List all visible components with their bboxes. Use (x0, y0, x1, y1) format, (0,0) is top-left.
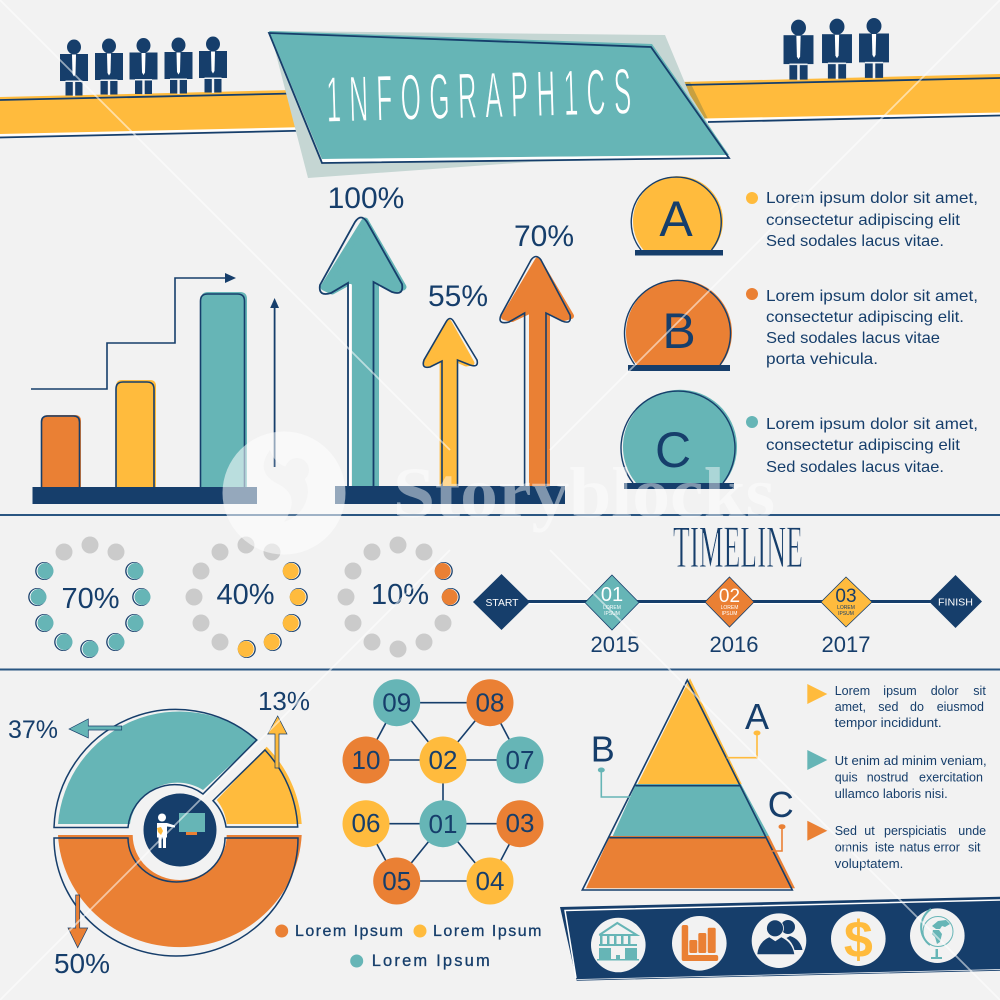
node 10 (342, 736, 390, 784)
node 07 (496, 736, 544, 784)
node 05 (373, 858, 420, 904)
year 2017: 2017 (822, 632, 870, 657)
yellow bar (116, 380, 156, 487)
milestone 01: IPSUM (604, 611, 620, 617)
item 1: Lorem (835, 684, 870, 698)
milestone 03: IPSUM (838, 611, 854, 617)
label B: B (591, 729, 615, 770)
item 2 (807, 750, 987, 801)
title plate shadow (270, 31, 729, 178)
timeline line (526, 602, 931, 604)
panel: icon ribbon (560, 897, 1000, 981)
text block B (746, 288, 978, 368)
item 3: Sed (835, 824, 857, 838)
radial progress 70% (28, 536, 151, 658)
pyramid outline (582, 680, 792, 890)
item 3: natus (900, 841, 930, 855)
item 2: ullamco laboris nisi. (835, 787, 948, 801)
text block C (746, 416, 978, 476)
right group of people icons (784, 18, 889, 80)
pyramid yellow tier (638, 678, 742, 784)
teal bar (201, 292, 247, 487)
node 03 (496, 800, 544, 847)
start marker (473, 574, 530, 630)
text block C: Lorem ipsum dolor sit amet, (766, 416, 978, 433)
vertical arrow (270, 298, 279, 467)
text block C: consectetur adipiscing elit (766, 437, 961, 454)
node 08: 08 (476, 688, 504, 718)
radial progress 10%: 10% (371, 579, 429, 611)
icon: bar chart (672, 916, 727, 971)
icon: dollar (831, 911, 886, 969)
item 3 (807, 821, 986, 871)
milestone 03: 03 (835, 586, 857, 607)
title plate (269, 31, 729, 163)
node 07: 07 (506, 745, 534, 775)
stepped arrow (31, 273, 236, 389)
item 1 (807, 684, 986, 730)
base bar (32, 487, 257, 504)
item 3: perspiciatis (884, 824, 947, 838)
watermark: Storyblocks (393, 453, 775, 533)
arrow to 13% (268, 716, 287, 768)
panel: numbered network (342, 679, 544, 904)
orange segment 50% (54, 835, 302, 956)
arrow base bar (335, 486, 565, 504)
item 3: ut (864, 824, 875, 838)
left ribbon band (0, 90, 310, 138)
left group of people icons (60, 36, 227, 96)
milestone 01: 01 (601, 584, 623, 606)
node 05: 05 (382, 866, 411, 896)
node 10: 10 (352, 745, 380, 775)
year 2015: 2015 (591, 632, 639, 657)
node 04 (466, 858, 514, 904)
item 3: sit (968, 841, 981, 855)
item 3: voluptatem. (835, 857, 903, 871)
label 13%: 13% (258, 686, 310, 716)
item 2: Ut enim ad minim veniam, (835, 754, 987, 768)
text block C: Sed sodales lacus vitae. (766, 459, 944, 476)
milestone 02 (705, 577, 754, 627)
badge C: C (655, 422, 691, 478)
item 3: omnis (835, 841, 868, 855)
label 70%: 70% (514, 220, 574, 253)
node 04: 04 (476, 866, 504, 896)
radial progress 70%: 70% (61, 583, 120, 615)
text block B: porta vehicula. (766, 351, 878, 368)
item 1: dolor (931, 684, 958, 698)
panel: timeline (473, 514, 982, 657)
item 3: unde (958, 824, 986, 838)
node 08 (466, 679, 514, 726)
arrow to 50% (68, 895, 88, 948)
node 09: 09 (382, 688, 411, 718)
node 02: 02 (429, 745, 457, 775)
badge A: A (659, 191, 693, 247)
header banner (0, 18, 1000, 178)
label 50%: 50% (54, 948, 110, 979)
yellow arrow 55% (423, 318, 477, 487)
node 03: 03 (506, 808, 534, 838)
node 02 (420, 736, 466, 784)
item 3: error (934, 841, 960, 855)
item 2: exercitation (919, 771, 983, 785)
pyramid orange tier (586, 836, 795, 888)
milestone 01 (585, 575, 639, 630)
label A: A (745, 696, 769, 737)
item 2: quis (835, 771, 858, 785)
label C: C (768, 784, 794, 825)
milestone 03 (821, 577, 872, 627)
finish marker: FINISH (938, 598, 973, 608)
panel: pyramid chart (582, 678, 795, 890)
milestone 01: LOREM (603, 605, 621, 611)
pyramid teal tier (613, 784, 769, 836)
connector B (598, 768, 630, 797)
icon: globe (910, 908, 965, 963)
yellow segment 13% (213, 747, 302, 827)
year 2016: 2016 (710, 632, 758, 657)
text block B: consectetur adipiscing elit. (766, 309, 964, 326)
arrow to 37% (69, 719, 122, 738)
right ribbon band (680, 74, 1000, 122)
node 06: 06 (352, 808, 380, 838)
icon: people (752, 913, 806, 968)
badge C (621, 390, 737, 489)
node 09 (373, 679, 420, 726)
network connectors (366, 703, 520, 881)
teal arrow 100% (320, 218, 403, 487)
legend (275, 923, 542, 970)
legend teal: Lorem Ipsum (372, 952, 490, 970)
item 1: tempor incididunt. (835, 716, 942, 730)
connector A (727, 730, 760, 758)
text block B: Lorem ipsum dolor sit amet, (766, 288, 978, 305)
orange arrow 70% (500, 256, 571, 487)
icon: dollar: $ (844, 911, 873, 969)
text block A (746, 190, 978, 250)
label 37%: 37% (8, 716, 58, 744)
badge A (631, 176, 723, 256)
item 1: do (910, 700, 924, 714)
start marker: START (486, 598, 518, 609)
item 3: iste (875, 841, 894, 855)
node 06 (342, 800, 390, 847)
bar outlines (42, 294, 244, 487)
node 01: 01 (429, 809, 457, 839)
connector C (772, 824, 786, 851)
label 55%: 55% (428, 280, 488, 313)
finish marker (929, 575, 982, 628)
item 1: eiusmod (937, 700, 984, 714)
radial progress 40%: 40% (216, 579, 275, 611)
milestone 02: 02 (719, 586, 740, 607)
text block A: Sed sodales lacus vitae. (766, 233, 944, 250)
panel: step bar chart (31, 273, 279, 504)
radial progress 10% (338, 536, 460, 658)
text block A: consectetur adipiscing elit (766, 212, 961, 229)
panel: A B C list (621, 176, 978, 489)
milestone 03: LOREM (837, 605, 855, 611)
item 1: amet, (835, 700, 866, 714)
text block A: Lorem ipsum dolor sit amet, (766, 190, 978, 207)
text block B: Sed sodales lacus vitae (766, 330, 940, 347)
item 2: nostrud (867, 771, 908, 785)
icon: bank (591, 918, 646, 972)
center circle with presenter icon (144, 794, 216, 866)
legend orange: Lorem Ipsum (295, 923, 403, 940)
title: 1NFOGRAPH1CS (325, 56, 640, 136)
label 100%: 100% (328, 182, 404, 215)
panel: donut chart (8, 686, 310, 979)
item 1: ipsum (883, 684, 917, 698)
teal segment 37% (54, 709, 258, 828)
badge B: B (662, 303, 696, 359)
panel: timeline: TIMELINE (673, 514, 803, 580)
orange bar (42, 415, 81, 487)
node 01 (420, 800, 466, 847)
panel: growth arrows chart (320, 182, 574, 504)
ribbon background (560, 897, 1000, 981)
badge B (624, 280, 732, 371)
radial progress 40% (186, 536, 308, 658)
milestone 02: LOREM (721, 605, 738, 611)
legend yellow: Lorem Ipsum (433, 923, 542, 940)
item 1: sit (973, 684, 986, 698)
milestone 02: IPSUM (722, 611, 737, 617)
item 1: sed (878, 700, 899, 714)
panel: pyramid text list (807, 684, 987, 871)
